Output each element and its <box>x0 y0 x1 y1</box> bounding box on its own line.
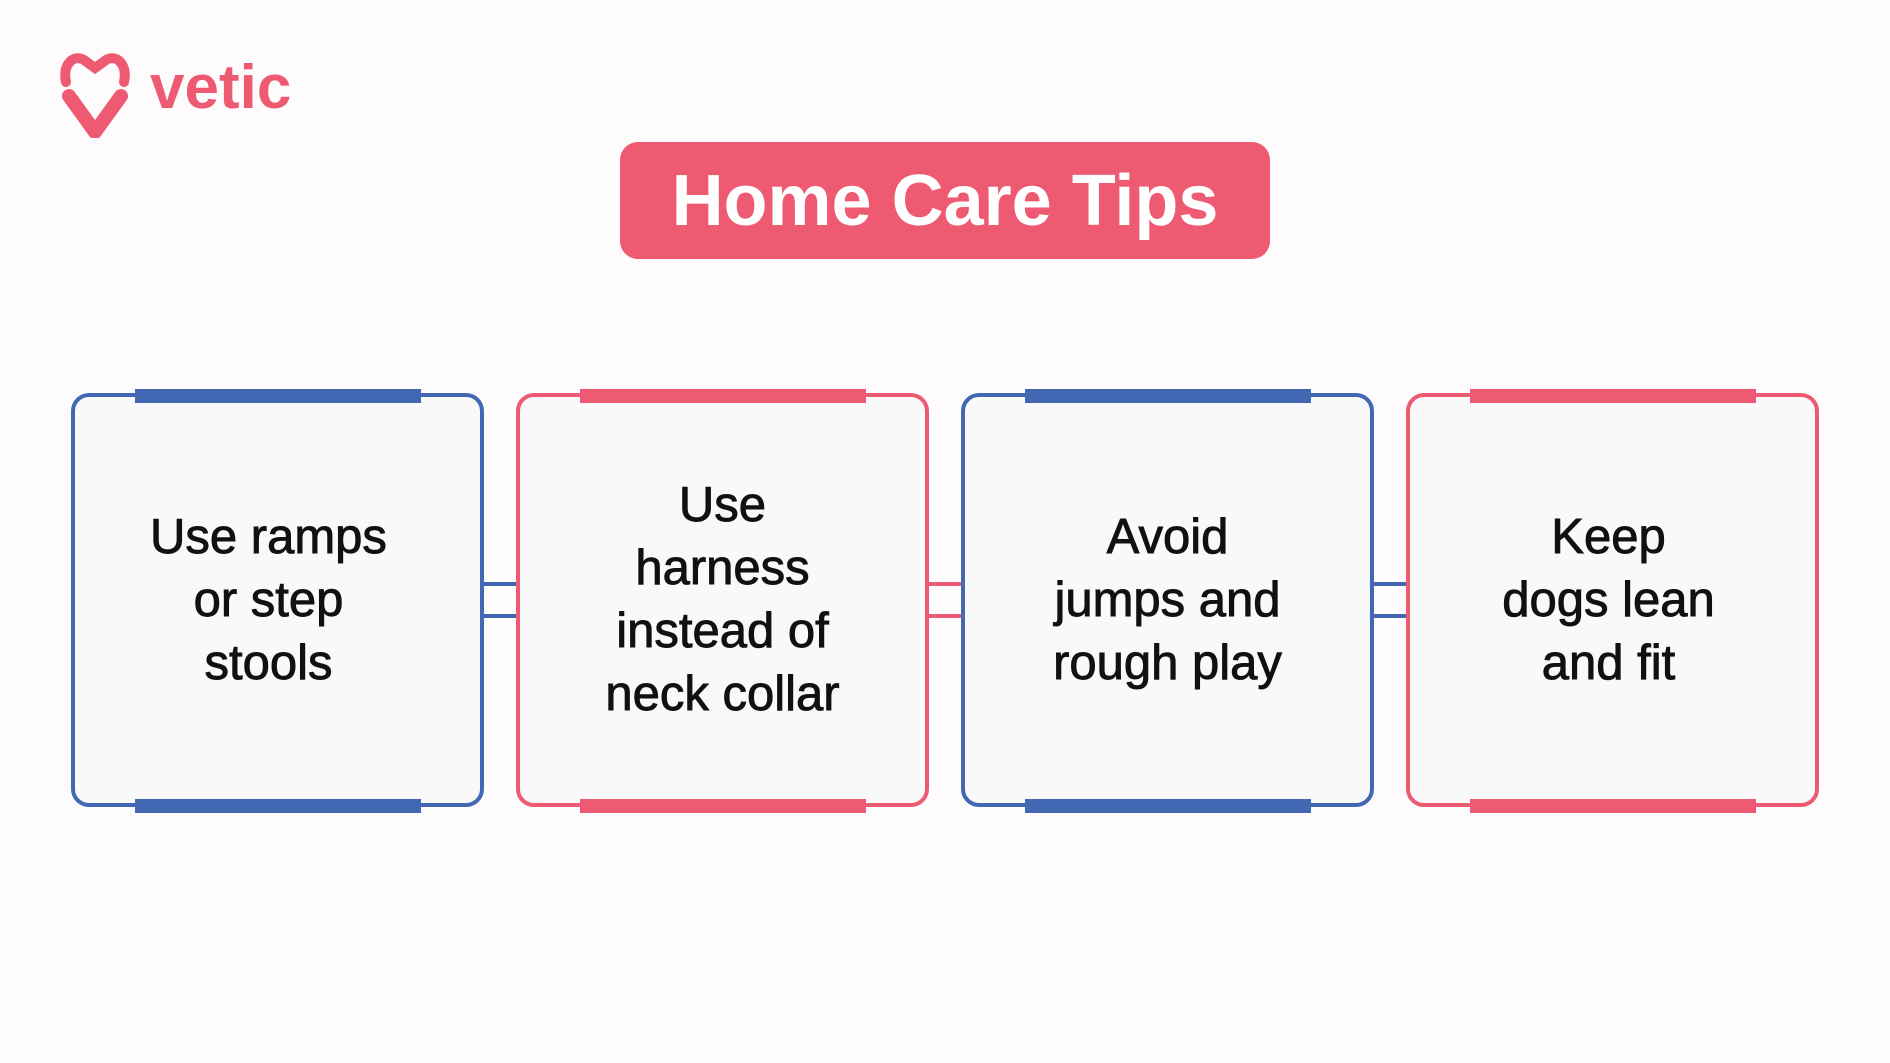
title <box>620 142 1270 259</box>
panel: harness <box>516 393 929 807</box>
panel: jumps <box>961 393 1374 807</box>
panel: harness: instead of <box>616 604 829 658</box>
panel: ramps <box>71 393 484 807</box>
panel: harness: neck collar <box>605 667 840 721</box>
panel: lean: Keep <box>1551 510 1666 564</box>
panel: harness: Use <box>679 478 766 532</box>
title: Home Care Tips <box>672 160 1218 240</box>
panel: jumps: Avoid <box>1107 510 1228 564</box>
icon: heart v <box>60 53 130 138</box>
panel: lean: and fit <box>1542 636 1675 690</box>
panel: jumps: jumps and <box>1054 572 1281 626</box>
panel: lean <box>1406 393 1819 807</box>
panel: jumps: rough play <box>1053 636 1282 690</box>
brand name: vetic <box>150 53 291 122</box>
panel: harness: harness <box>635 541 810 595</box>
logo <box>60 53 291 138</box>
panel: ramps: or step <box>194 572 343 626</box>
panel: ramps: stools <box>204 636 332 690</box>
panel: ramps: Use ramps <box>150 510 387 564</box>
panel: lean: dogs lean <box>1502 572 1715 626</box>
